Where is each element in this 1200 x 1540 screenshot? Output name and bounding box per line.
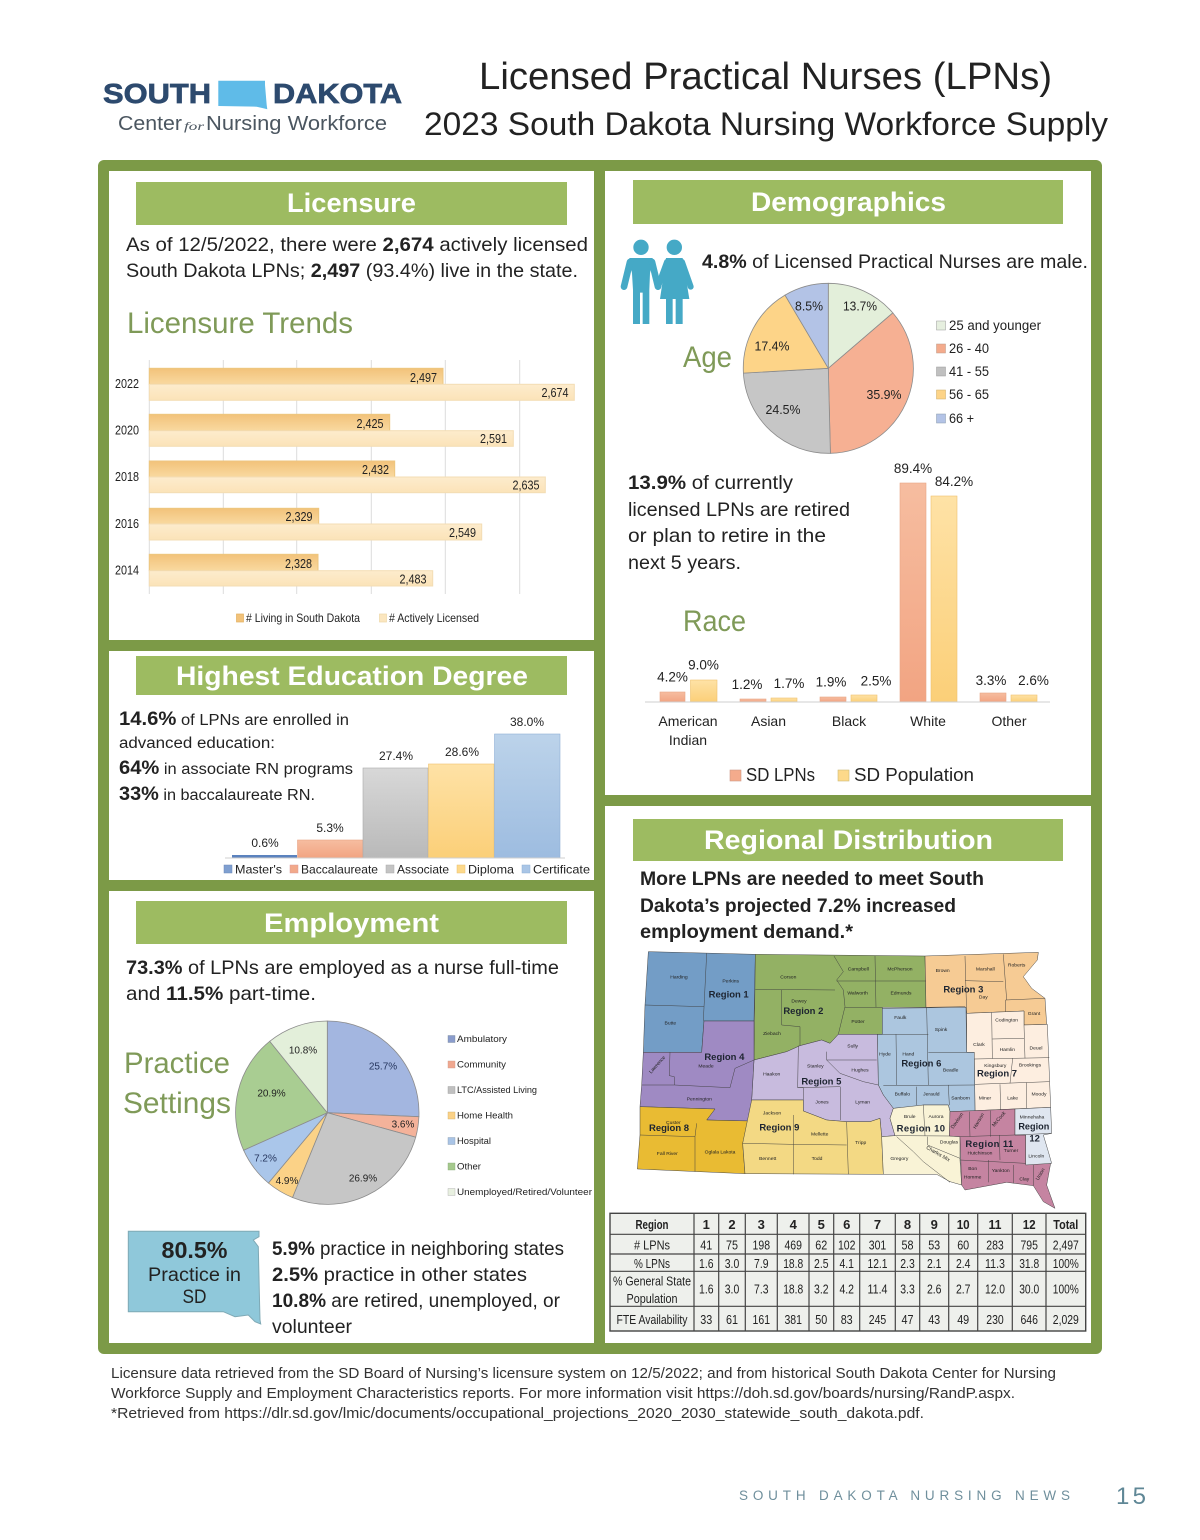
text: employment summary xyxy=(126,957,559,1005)
map: South Dakota regions: Bennett xyxy=(759,1156,777,1162)
table: regional LPN data: 18.8 xyxy=(783,1282,803,1296)
map: South Dakota regions: Region 9 xyxy=(759,1123,799,1134)
bar chart: licensure trends: 2,425 xyxy=(356,417,384,431)
table: regional LPN data: 30.0 xyxy=(1019,1282,1039,1296)
footer: sources: Workforce Supply and Employment Characteristics reports. For more information visit https://doh.sd.gov/boards/nursing/RandP.aspx. xyxy=(111,1386,1015,1402)
map: South Dakota regions: Spink xyxy=(935,1027,948,1033)
pie chart: practice settings: 10.8% xyxy=(289,1046,317,1056)
map: South Dakota regions: Pennington xyxy=(687,1097,712,1103)
table: regional LPN data: 3.0 xyxy=(725,1256,739,1271)
bar chart: race: 89.4% xyxy=(894,461,932,476)
map: South Dakota regions: McCook xyxy=(991,1110,1008,1128)
legend: practice settings: Home Health xyxy=(457,1110,513,1122)
panel: licensure xyxy=(109,171,594,640)
bar chart: education degree: 38.0% xyxy=(510,715,544,729)
table: regional LPN data: 245 xyxy=(869,1312,886,1327)
table: regional LPN data: % General State xyxy=(613,1274,691,1288)
text: advanced education xyxy=(119,709,353,805)
bar chart: race: Other xyxy=(991,713,1027,729)
bar chart: licensure trends: 2,497 xyxy=(410,371,437,385)
bar chart: race: 3.3% xyxy=(976,673,1006,688)
map: South Dakota regions: Yankton xyxy=(992,1168,1010,1174)
text: projected demand: Dakota’s projected 7.2% increased xyxy=(640,896,956,917)
map: South Dakota regions: Brown xyxy=(936,968,950,974)
map: South Dakota regions: Tripp xyxy=(855,1140,866,1146)
logo: South Dakota Center for Nursing Workforce: for xyxy=(184,119,204,133)
table: regional LPN data: 3.2 xyxy=(814,1282,829,1296)
text: employment summary: 73.3% of LPNs are employed as a nurse full-time xyxy=(126,957,559,979)
text: employment summary: and 11.5% part-time. xyxy=(126,983,316,1005)
map: South Dakota regions: Douglas xyxy=(940,1139,959,1145)
map: South Dakota regions: Ziebach xyxy=(763,1031,781,1037)
table: regional LPN data: 18.8 xyxy=(783,1256,803,1271)
bar chart: licensure trends xyxy=(115,360,574,625)
table: regional LPN data: 2 xyxy=(728,1217,736,1232)
bar chart: licensure trends: 2,591 xyxy=(480,432,507,446)
text: practice location: 10.8% are retired, unemployed, or xyxy=(272,1290,560,1312)
table: regional LPN data: % LPNs xyxy=(634,1256,670,1271)
table: regional LPN data: 2.4 xyxy=(956,1256,970,1271)
table: regional LPN data: 41 xyxy=(700,1238,712,1252)
table: regional LPN data: 6 xyxy=(843,1217,850,1232)
map: South Dakota regions: Region 1 xyxy=(709,990,749,1001)
table: regional LPN data: 33 xyxy=(700,1312,712,1327)
map: South Dakota regions: Hanson xyxy=(972,1112,986,1130)
legend: education: Master's xyxy=(235,862,282,876)
map: South Dakota regions: Meade xyxy=(698,1063,714,1069)
table: regional LPN data: 4.2 xyxy=(839,1282,854,1296)
table: regional LPN data: 3.0 xyxy=(725,1282,739,1296)
legend: education: Associate xyxy=(397,862,449,876)
heading: Practice Settings xyxy=(123,1047,231,1120)
table: regional LPN data: 47 xyxy=(902,1312,914,1327)
table: regional LPN data: 83 xyxy=(841,1312,853,1327)
text: practice location: 2.5% practice in other states xyxy=(272,1264,527,1286)
heading: Race: Race xyxy=(683,605,746,638)
table: regional LPN data: 646 xyxy=(1020,1312,1038,1327)
map: South Dakota regions: McPherson xyxy=(887,966,913,972)
footer: page number: 15 xyxy=(1116,1483,1146,1510)
map: South Dakota regions: Lyman xyxy=(855,1100,870,1106)
table: regional LPN data: 49 xyxy=(957,1312,969,1327)
heading: Employment: Employment xyxy=(264,908,439,938)
map: South Dakota regions: Fall River xyxy=(657,1151,678,1157)
heading: Licensure: Licensure xyxy=(287,188,416,218)
legend: race xyxy=(730,765,974,785)
table: regional LPN data: 3.3 xyxy=(900,1282,915,1296)
map: South Dakota regions: Moody xyxy=(1032,1092,1047,1098)
map: South Dakota regions: Roberts xyxy=(1008,962,1026,968)
pie chart: practice settings: 20.9% xyxy=(257,1088,286,1100)
map: South Dakota regions: Walworth xyxy=(847,991,868,997)
bar chart: licensure trends: 2016 xyxy=(115,517,139,531)
bar chart: licensure trends: # Actively Licensed xyxy=(389,611,479,625)
map: South Dakota regions: Harding xyxy=(670,975,688,981)
table: regional LPN data: FTE Availability xyxy=(616,1312,688,1327)
map: South Dakota regions: Gregory xyxy=(890,1156,909,1162)
map: South Dakota regions: Hutchinson xyxy=(968,1150,993,1156)
table: regional LPN data: Population xyxy=(626,1291,678,1306)
text: practice location: volunteer xyxy=(272,1316,353,1338)
map: South Dakota regions: Region 2 xyxy=(783,1006,823,1017)
map: South Dakota regions: Butte xyxy=(665,1020,676,1026)
table: regional LPN data: 43 xyxy=(928,1312,940,1327)
table: regional LPN data: 58 xyxy=(902,1238,914,1252)
bar chart: race: 1.2% xyxy=(732,677,762,692)
table: regional LPN data: 11.3 xyxy=(985,1256,1005,1271)
heading: Regional Distribution xyxy=(633,819,1063,861)
heading: Highest Education Degree xyxy=(136,656,567,695)
table: regional LPN data: 61 xyxy=(726,1312,738,1327)
map: South Dakota regions: Beadle xyxy=(943,1068,959,1074)
bar chart: licensure trends: 2,432 xyxy=(362,463,389,477)
table: regional LPN data: 3 xyxy=(758,1217,765,1232)
table: regional LPN data: 8 xyxy=(904,1217,911,1232)
table: regional LPN data: Region xyxy=(636,1217,669,1232)
heading: Licensure xyxy=(136,182,567,225)
map: South Dakota regions: Region 11 xyxy=(965,1139,1014,1150)
map: South Dakota regions: Hand xyxy=(902,1052,915,1058)
table: regional LPN data: 11 xyxy=(988,1217,1002,1232)
bar chart: licensure trends: 2,549 xyxy=(449,526,476,540)
bar chart: race: 2.6% xyxy=(1018,673,1049,688)
text: advanced education: 64% in associate RN programs xyxy=(119,758,353,779)
map: South Dakota regions: Charles Mix xyxy=(925,1145,951,1164)
legend: age: 66 + xyxy=(949,411,974,426)
map: South Dakota regions: Homme xyxy=(964,1174,982,1180)
legend: practice settings: Ambulatory xyxy=(457,1034,507,1045)
bar chart: race: 9.0% xyxy=(688,658,719,672)
map: South Dakota regions: Brookings xyxy=(1019,1062,1042,1068)
bar chart: race: 84.2% xyxy=(935,474,973,489)
map: South Dakota regions: Clark xyxy=(973,1042,985,1048)
table: regional LPN data: 12.0 xyxy=(985,1282,1005,1296)
bar chart: race: Black xyxy=(832,713,867,729)
bar chart: licensure trends: 2020 xyxy=(115,424,139,438)
map: South Dakota regions: Lake xyxy=(1007,1095,1018,1101)
text: retirement: next 5 years. xyxy=(628,552,741,574)
table: regional LPN data: 2,029 xyxy=(1053,1312,1079,1327)
table: regional LPN data: 198 xyxy=(753,1238,770,1252)
pie chart: age: 13.7% xyxy=(843,298,877,314)
map: South Dakota regions: 12 xyxy=(1029,1134,1040,1145)
callout: 80.5% practice in SD: Practice in xyxy=(148,1265,241,1286)
map: South Dakota regions: Miner xyxy=(979,1095,992,1101)
callout: 80.5% practice in SD: 80.5% xyxy=(162,1237,228,1263)
legend: age: 41 - 55 xyxy=(949,364,989,379)
panel: highest education degree xyxy=(109,651,594,880)
title xyxy=(424,56,1109,142)
table: regional LPN data: 12.1 xyxy=(868,1256,888,1271)
map: South Dakota regions: Mellette xyxy=(811,1132,829,1138)
bar chart: licensure trends: 2,635 xyxy=(512,478,540,492)
table: regional LPN data: 5 xyxy=(818,1217,825,1232)
map: South Dakota regions: Jones xyxy=(815,1100,829,1106)
table: regional LPN data: 7.3 xyxy=(754,1282,769,1296)
map: South Dakota regions: Custer xyxy=(666,1120,681,1126)
table: regional LPN data: 1.6 xyxy=(699,1282,714,1296)
pie chart: age: 8.5% xyxy=(795,298,823,314)
map: South Dakota regions: Region 3 xyxy=(943,984,983,995)
pie chart: age: 17.4% xyxy=(754,338,790,354)
map: South Dakota regions: Dewey xyxy=(791,999,807,1005)
legend: education: Baccalaureate xyxy=(301,862,378,876)
table: regional LPN data: 301 xyxy=(869,1238,886,1252)
text: licensure summary xyxy=(126,234,588,282)
pie chart: practice settings: 3.6% xyxy=(392,1120,415,1130)
map: South Dakota regions: Clay xyxy=(1019,1176,1030,1182)
table: regional LPN data: 2,497 xyxy=(1053,1238,1079,1252)
legend: practice settings: LTC/Assisted Living xyxy=(457,1085,537,1096)
legend: race: SD LPNs xyxy=(746,765,815,785)
footer: sources xyxy=(111,1366,1056,1422)
table: regional LPN data: 100% xyxy=(1053,1282,1079,1296)
heading: Age: Age xyxy=(683,341,732,374)
text: retirement: licensed LPNs are retired xyxy=(628,499,850,521)
heading: Practice Settings: Practice xyxy=(124,1047,230,1080)
bar chart: licensure trends: 2022 xyxy=(115,377,139,391)
bar chart: race: 1.9% xyxy=(816,674,846,690)
table: regional LPN data: 53 xyxy=(928,1238,940,1252)
pie chart: age xyxy=(743,283,913,453)
legend: practice settings: Unemployed/Retired/Volunteer xyxy=(457,1187,592,1198)
map: South Dakota regions: Todd xyxy=(812,1156,823,1162)
heading: Highest Education Degree: Highest Education Degree xyxy=(176,661,528,691)
heading: Demographics xyxy=(633,180,1063,224)
text: retirement: 13.9% of currently xyxy=(628,472,793,494)
table: regional LPN data: 230 xyxy=(986,1312,1004,1327)
legend: age: 26 - 40 xyxy=(949,341,989,356)
bar chart: education degree xyxy=(224,715,590,876)
legend: practice settings: Community xyxy=(457,1060,506,1070)
map: South Dakota regions: Haakon xyxy=(763,1072,780,1078)
legend: practice settings xyxy=(448,1034,592,1198)
bar chart: licensure trends: 2018 xyxy=(115,470,139,484)
map: South Dakota regions: Codington xyxy=(995,1018,1018,1024)
bar chart: race: 4.2% xyxy=(657,670,688,684)
map: South Dakota regions: Davison xyxy=(950,1112,965,1130)
green frame xyxy=(98,160,1102,1354)
map: South Dakota regions: Hamlin xyxy=(1000,1047,1015,1053)
map: South Dakota regions: Region 10 xyxy=(897,1124,945,1135)
map: South Dakota regions: Turner xyxy=(1004,1148,1019,1154)
map: South Dakota regions: Sully xyxy=(847,1044,859,1050)
callout: 80.5% practice in SD xyxy=(128,1231,261,1324)
text: advanced education: 33% in baccalaureate RN. xyxy=(119,784,315,805)
map: South Dakota regions: Region 5 xyxy=(801,1077,842,1088)
callout: 80.5% practice in SD: SD xyxy=(182,1287,206,1308)
table: regional LPN data: 9 xyxy=(931,1217,938,1232)
bar chart: licensure trends: 2014 xyxy=(115,564,139,578)
table: regional LPN data: 1 xyxy=(703,1217,710,1232)
bar chart: race: American xyxy=(658,713,718,729)
table: regional LPN data: 60 xyxy=(957,1238,969,1252)
map: South Dakota regions: Stanley xyxy=(807,1064,824,1070)
bar chart: education degree: 27.4% xyxy=(379,749,413,763)
logo: South Dakota Center for Nursing Workforce: Nursing Workforce xyxy=(206,113,387,135)
footer: publication name: SOUTH DAKOTA NURSING NEWS xyxy=(739,1488,1070,1503)
bar chart: licensure trends: 2,483 xyxy=(400,572,427,586)
map: South Dakota regions: Potter xyxy=(851,1019,865,1025)
bar chart: race xyxy=(645,461,1050,748)
text: advanced education: 14.6% of LPNs are enrolled in xyxy=(119,709,349,730)
text: projected demand: More LPNs are needed to meet South xyxy=(640,869,984,890)
map: South Dakota regions: Buffalo xyxy=(895,1092,910,1098)
title: 2023 South Dakota Nursing Workforce Supply xyxy=(424,106,1109,142)
text: practice location xyxy=(272,1238,564,1338)
legend: age xyxy=(936,318,1041,426)
legend: education xyxy=(224,862,590,876)
map: South Dakota regions: Jerauld xyxy=(923,1092,940,1098)
table: regional LPN data: 31.8 xyxy=(1019,1256,1039,1271)
map: South Dakota regions: Deuel xyxy=(1029,1045,1043,1051)
bar chart: licensure trends: # Living in South Dakota xyxy=(246,611,360,625)
logo: South Dakota Center for Nursing Workforce: Center xyxy=(118,113,182,135)
table: regional LPN data: 62 xyxy=(815,1238,827,1252)
table: regional LPN data: 4.1 xyxy=(839,1256,854,1271)
table: regional LPN data: 50 xyxy=(815,1312,827,1327)
legend: age: 25 and younger xyxy=(949,318,1041,333)
title: Licensed Practical Nurses (LPNs) xyxy=(479,56,1052,98)
map: South Dakota regions xyxy=(637,952,1055,1208)
bar chart: race: 1.7% xyxy=(774,676,804,691)
text: projected demand: employment demand.* xyxy=(640,922,854,943)
pie chart: practice settings: 26.9% xyxy=(349,1174,377,1184)
bar chart: licensure trends: 2,329 xyxy=(286,510,313,524)
table: regional LPN data: 469 xyxy=(784,1238,802,1252)
table: regional LPN data: 75 xyxy=(726,1238,738,1252)
map: South Dakota regions: Aurora xyxy=(929,1114,944,1120)
map: South Dakota regions: Perkins xyxy=(722,979,739,985)
table: regional LPN data: 161 xyxy=(753,1312,770,1327)
bar chart: education degree: 5.3% xyxy=(316,821,344,835)
text: projected demand xyxy=(640,869,984,943)
pie chart: age: 24.5% xyxy=(766,402,801,417)
map: South Dakota regions: Lincoln xyxy=(1028,1154,1044,1160)
table: regional LPN data: 7.9 xyxy=(754,1256,769,1271)
pie chart: age: 35.9% xyxy=(866,387,902,402)
map: South Dakota regions: Edmunds xyxy=(890,991,912,997)
bar chart: licensure trends: 2,674 xyxy=(542,386,569,400)
legend: practice settings: Other xyxy=(457,1162,481,1172)
icon: man and woman xyxy=(624,240,691,324)
legend: education: Diploma xyxy=(468,862,514,876)
map: South Dakota regions: Jackson xyxy=(763,1111,781,1117)
map: South Dakota regions: Region 6 xyxy=(901,1058,941,1069)
table: regional LPN data: 7 xyxy=(874,1217,881,1232)
table: regional LPN data: 1.6 xyxy=(699,1256,714,1271)
map: South Dakota regions: Sanborn xyxy=(951,1095,970,1101)
heading: Demographics: Demographics xyxy=(751,187,946,217)
panel: employment xyxy=(109,891,594,1343)
table: regional LPN data: Total xyxy=(1053,1217,1078,1232)
map: South Dakota regions: Hyde xyxy=(879,1052,891,1058)
map: South Dakota regions: Region xyxy=(1018,1122,1050,1133)
map: South Dakota regions: Oglala Lakota xyxy=(705,1149,736,1155)
table: regional LPN data: 2.5 xyxy=(814,1256,829,1271)
footer: sources: *Retrieved from https://dlr.sd.gov/lmic/documents/occupational_projections_2020_2030_statewide_south_dakota.pdf. xyxy=(111,1406,924,1422)
logo: South Dakota Center for Nursing Workforce: SOUTH xyxy=(103,78,211,109)
table: regional LPN data: 2.3 xyxy=(900,1256,915,1271)
pie chart: practice settings: 7.2% xyxy=(254,1154,277,1164)
text: advanced education: advanced education: xyxy=(119,735,275,752)
pie chart: practice settings: 25.7% xyxy=(369,1062,397,1072)
bar chart: race: Asian xyxy=(751,713,786,729)
table: regional LPN data: 12 xyxy=(1023,1217,1036,1232)
map: South Dakota regions: Minnehaha xyxy=(1020,1115,1045,1121)
pie chart: practice settings xyxy=(236,1021,419,1204)
panel: demographics xyxy=(605,171,1091,795)
text: licensure summary: As of 12/5/2022, there were 2,674 actively licensed xyxy=(126,234,588,256)
table: regional LPN data: 102 xyxy=(838,1238,855,1252)
panel: regional distribution xyxy=(605,806,1091,1343)
table: regional LPN data: 283 xyxy=(986,1238,1004,1252)
text: male share: 4.8% of Licensed Practical Nurses are male. xyxy=(702,251,1088,273)
bar chart: licensure trends: 2,328 xyxy=(285,557,312,571)
table: regional LPN data: 2.1 xyxy=(927,1256,941,1271)
heading: Practice Settings: Settings xyxy=(123,1087,231,1120)
legend: race: SD Population xyxy=(854,765,974,785)
legend: education: Certificate xyxy=(533,862,590,876)
table: regional LPN data: 795 xyxy=(1020,1238,1038,1252)
bar chart: race: White xyxy=(910,713,946,729)
bar chart: education degree: 28.6% xyxy=(445,745,479,759)
table: regional LPN data: # LPNs xyxy=(634,1238,670,1252)
map: South Dakota regions: Region 7 xyxy=(977,1068,1017,1079)
logo: South Dakota Center for Nursing Workforce: DAKOTA xyxy=(273,78,402,109)
table: regional LPN data: 381 xyxy=(784,1312,802,1327)
legend: age: 56 - 65 xyxy=(949,387,989,402)
map: South Dakota regions: Faulk xyxy=(894,1015,907,1021)
map: South Dakota regions: Brule xyxy=(904,1114,916,1120)
map: South Dakota regions: Lawrence xyxy=(648,1055,667,1075)
heading: Employment xyxy=(136,901,567,944)
table: regional LPN data xyxy=(610,1213,1086,1331)
pie chart: practice settings: 4.9% xyxy=(276,1176,299,1187)
table: regional LPN data: 10 xyxy=(957,1217,970,1232)
map: South Dakota regions: Corson xyxy=(780,975,797,981)
table: regional LPN data: 4 xyxy=(790,1217,798,1232)
table: regional LPN data: 11.4 xyxy=(868,1282,888,1296)
text: retirement: or plan to retire in the xyxy=(628,525,826,547)
table: regional LPN data: 2.7 xyxy=(956,1282,970,1296)
heading: Regional Distribution: Regional Distribution xyxy=(704,825,993,855)
map: South Dakota regions: Kingsbury xyxy=(984,1063,1007,1069)
map: South Dakota regions: Campbell xyxy=(848,966,869,972)
legend: practice settings: Hospital xyxy=(457,1136,491,1147)
text: licensure summary: South Dakota LPNs; 2,497 (93.4%) live in the state. xyxy=(126,260,578,282)
heading: Licensure Trends: Licensure Trends xyxy=(127,307,353,340)
map: South Dakota regions: Grant xyxy=(1028,1011,1041,1017)
table: regional LPN data: 100% xyxy=(1053,1256,1079,1271)
text: practice location: 5.9% practice in neighboring states xyxy=(272,1238,564,1260)
footer: sources: Licensure data retrieved from the SD Board of Nursing’s licensure system on 12/5/2022; and from historical South Dakota Center for Nursing xyxy=(111,1366,1056,1382)
logo: South Dakota Center for Nursing Workforce xyxy=(103,78,402,135)
bar chart: education degree: 0.6% xyxy=(251,836,279,850)
map: South Dakota regions: Bon xyxy=(968,1166,977,1172)
map: South Dakota regions: Region 4 xyxy=(704,1052,745,1063)
map: South Dakota regions: Region 8 xyxy=(649,1123,689,1134)
text: retirement xyxy=(628,472,850,574)
table: regional LPN data: 2.6 xyxy=(927,1282,941,1296)
bar chart: race: 2.5% xyxy=(861,674,891,688)
map: South Dakota regions: Hughes xyxy=(851,1068,869,1074)
map: South Dakota regions: Day xyxy=(979,995,988,1001)
map: South Dakota regions: Union xyxy=(1035,1167,1047,1182)
bar chart: race: Indian xyxy=(669,732,707,748)
map: South Dakota regions: Marshall xyxy=(976,966,995,972)
